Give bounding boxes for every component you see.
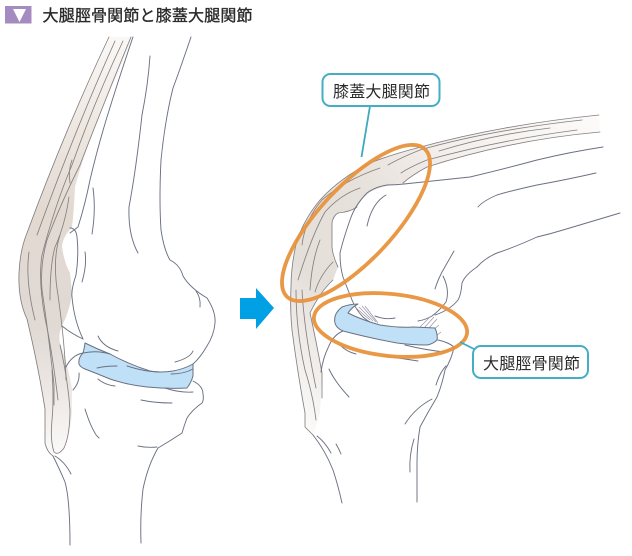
title text: 大腿脛骨関節と膝蓋大腿関節 [42,7,252,25]
femur outline, right knee [340,147,620,328]
callout: 大腿脛骨関節: 大腿脛骨関節 [483,355,580,373]
illustration: knee flexed [260,115,620,503]
quadriceps tendon, left knee [19,37,133,456]
cartilage hatch [356,306,441,336]
icon: purple box with down triangle [5,6,32,24]
meniscus, left knee [79,343,193,388]
meniscus, right knee [335,304,441,345]
tibia outline, left knee [53,353,203,545]
arrow [240,288,274,329]
femur outline, left knee [62,37,215,364]
orange ellipse: femorotibial joint [311,286,470,364]
title [5,6,252,25]
tibia outline, right knee [313,331,454,503]
quadriceps tendon, right knee [290,115,600,435]
callout: 膝蓋大腿関節 [322,74,440,157]
orange ellipse: patellofemoral joint [260,124,452,322]
illustration: knee extended [19,37,215,545]
callout: 大腿脛骨関節 [460,342,588,378]
callout: 膝蓋大腿関節: 膝蓋大腿関節 [333,83,430,101]
